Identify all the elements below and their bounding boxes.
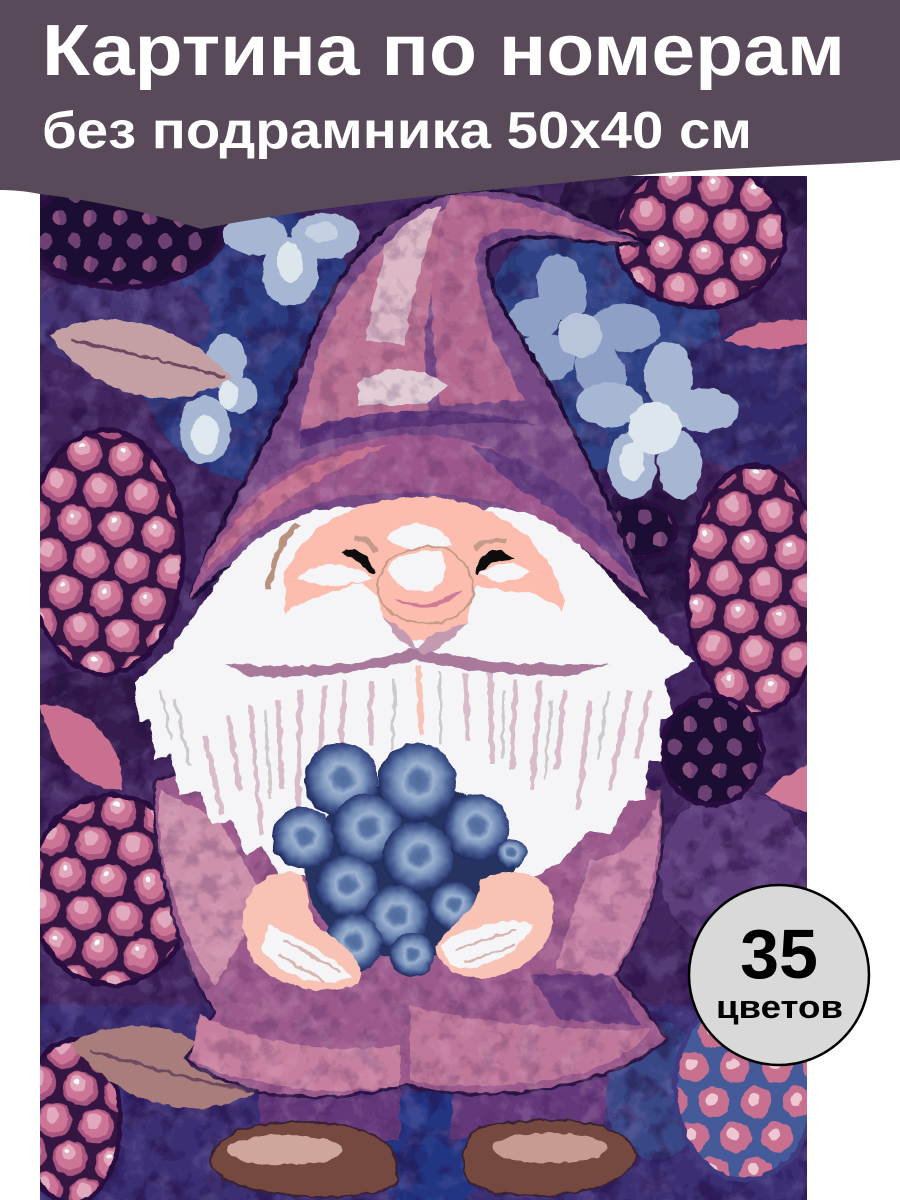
leaf: upper left xyxy=(50,320,232,398)
flower: top centre xyxy=(223,212,359,306)
skin xyxy=(285,497,565,640)
berries xyxy=(24,163,823,1200)
mustache left xyxy=(284,583,410,642)
flower: right lower xyxy=(576,341,739,499)
leaf: right pink upper xyxy=(725,320,815,348)
right hand xyxy=(435,872,554,978)
eyebrows xyxy=(355,538,505,552)
hands xyxy=(243,872,554,990)
beard xyxy=(135,507,695,880)
flowers xyxy=(179,212,739,499)
mustache right xyxy=(426,586,564,665)
boots xyxy=(210,1120,637,1197)
leaves xyxy=(40,320,820,1108)
subtitle: без подрамника 50х40 см xyxy=(42,102,752,160)
gnome hat xyxy=(190,190,650,600)
badge: 35 colours xyxy=(689,885,869,1065)
flower: left of hat xyxy=(179,334,258,464)
gnome body and legs xyxy=(152,772,668,1141)
leaf: left pink xyxy=(40,705,122,790)
mustache shading around nose xyxy=(383,617,467,655)
painting background xyxy=(10,150,830,1200)
face xyxy=(264,496,565,665)
header banner xyxy=(0,0,900,229)
badge: 35 colours: цветов xyxy=(716,989,843,1025)
cheek highlights xyxy=(297,564,373,586)
title: Картина по номерам xyxy=(42,11,845,91)
forehead highlight xyxy=(387,523,452,550)
leaf: right pink lower xyxy=(765,765,807,812)
eyes xyxy=(342,549,374,574)
blueberries xyxy=(272,743,526,977)
left hand xyxy=(243,872,362,990)
painting: gnome with berries xyxy=(10,150,830,1200)
nose xyxy=(378,547,473,623)
badge: 35 colours: 35 xyxy=(740,915,818,993)
flower: right upper xyxy=(508,254,661,390)
leaf: lower left xyxy=(70,1025,258,1108)
